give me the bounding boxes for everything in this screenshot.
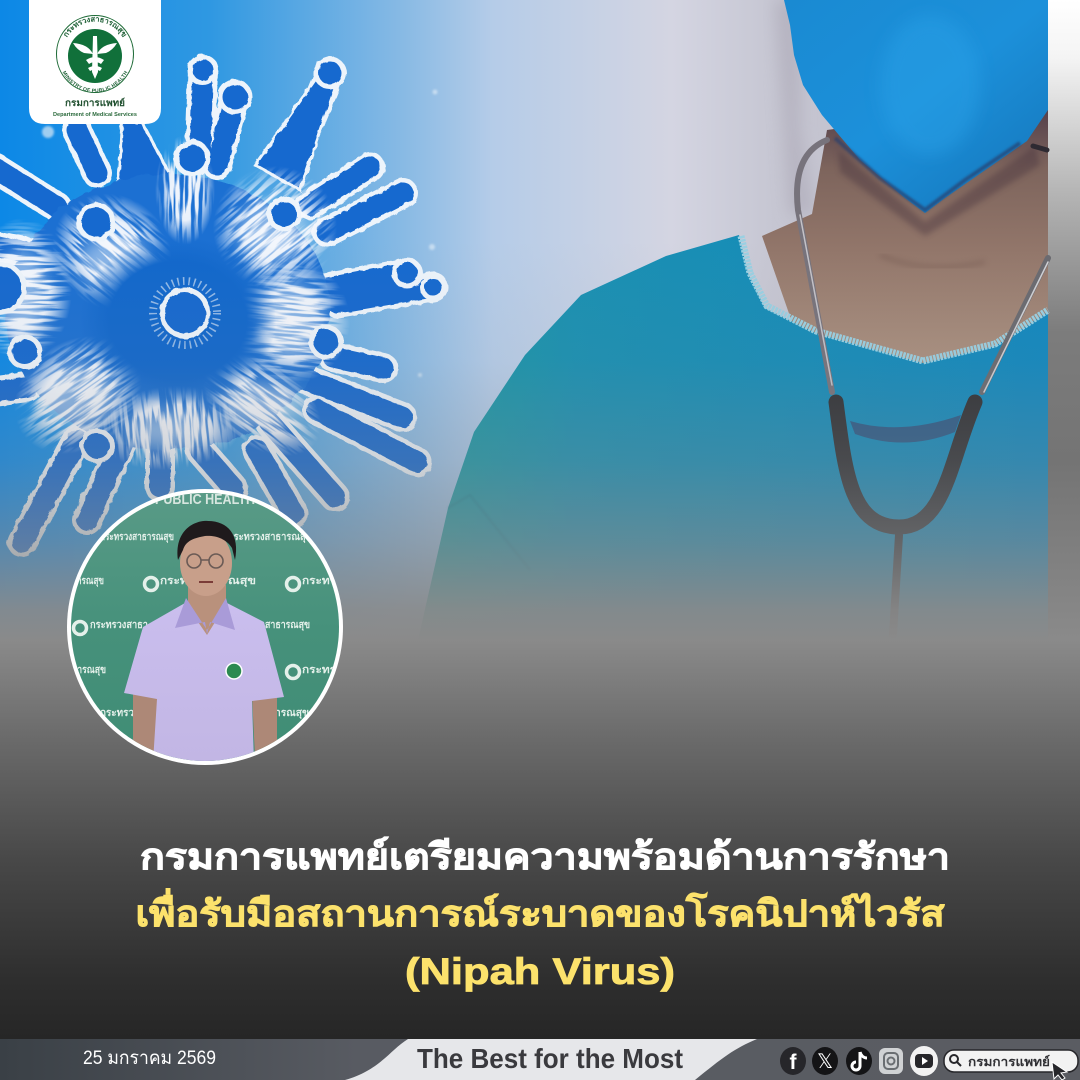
- arms: [133, 694, 277, 752]
- mask shadow: [835, 138, 1020, 210]
- shirt: [124, 603, 284, 762]
- backdrop text: ณสุข: [228, 576, 256, 587]
- logo seal: [56, 15, 134, 93]
- virus body: [0, 135, 362, 478]
- scrub sleeve fold: [448, 495, 530, 570]
- head: [180, 530, 232, 596]
- backdrop text: PUBLIC HEALTH: [155, 491, 255, 508]
- mouth: [199, 581, 213, 583]
- date: 25 มกราคม 2569: [83, 1048, 216, 1069]
- neck shadow: [838, 146, 1040, 236]
- soft white glow lobes: [0, 202, 322, 448]
- icon: x: 𝕏: [817, 1051, 833, 1073]
- slogan ribbon: [345, 1039, 757, 1080]
- virus spikes: [0, 70, 433, 542]
- doctor with mask and stethoscope: [418, 0, 1048, 640]
- wall shadow beside neck: [775, 0, 815, 215]
- backdrop text: กระทรวงสาธา: [90, 620, 148, 631]
- logo card: [29, 0, 161, 124]
- hair: [178, 521, 236, 560]
- portrait circle: [60, 485, 350, 775]
- floating particles: [42, 90, 438, 377]
- shirt pocket logo: [226, 663, 242, 679]
- virus wide spikes: [118, 70, 338, 190]
- hair texture lobes: [0, 135, 362, 478]
- icon: facebook: [780, 1047, 806, 1075]
- virus ring nodes: [0, 57, 444, 461]
- center ring hairs: [153, 281, 217, 345]
- logo english name: Department of Medical Services: [53, 112, 137, 118]
- neck skin: [188, 585, 226, 640]
- caduceus emblem: [73, 36, 117, 79]
- search pill: กรมการแพทย์: [968, 1054, 1050, 1069]
- scrub collar: [741, 236, 1048, 361]
- headline line 3: (Nipah Virus): [405, 951, 675, 992]
- scrub top: [418, 235, 1048, 640]
- headline line 2: เพื่อรับมือสถานการณ์ระบาดของโรคนิปาห์ไวรัส: [136, 888, 945, 934]
- backdrop text: กระทร: [302, 576, 337, 587]
- footer bar: [0, 1039, 1080, 1080]
- fade overlays: [0, 240, 1048, 642]
- backdrop text: ธารณสุข: [72, 665, 106, 676]
- backdrop text: ธารณสุข: [72, 576, 104, 587]
- stethoscope: [797, 140, 1048, 635]
- icon: tiktok: [846, 1047, 872, 1075]
- backdrop text: กระทรวงสาธารณสุข: [228, 532, 312, 543]
- backdrop text: กระทร: [302, 665, 337, 676]
- icon: facebook: f: [790, 1051, 798, 1074]
- slogan: The Best for the Most: [417, 1043, 683, 1074]
- headline: [136, 836, 950, 992]
- search pill: [944, 1050, 1078, 1072]
- backdrop text: ารณสุข: [275, 708, 309, 719]
- virus illustration: [0, 57, 444, 542]
- backdrop text: สาธารณสุข: [265, 620, 310, 631]
- face mask: [784, 0, 1048, 213]
- neck crease: [880, 255, 985, 267]
- right white strip: [1048, 0, 1080, 640]
- icon: instagram: [879, 1048, 903, 1074]
- logo thai name: กรมการแพทย์: [65, 97, 125, 109]
- mask highlight: [880, 15, 980, 155]
- backdrop text: กระทรวงสาธารณสุข: [100, 532, 174, 543]
- backdrop emblems: [74, 578, 300, 678]
- logo seal: MINISTRY OF PUBLIC HEALTH: [62, 70, 128, 92]
- backdrop text: กระทรว: [100, 708, 134, 719]
- backdrop text: [72, 491, 337, 719]
- collar: [175, 598, 235, 634]
- icon: cursor: [1052, 1062, 1067, 1080]
- logo seal: กระทรวงสาธารณสุข: [64, 16, 126, 38]
- virus blue core: [80, 236, 276, 404]
- headline line 1: กรมการแพทย์เตรียมความพร้อมด้านการรักษา: [140, 836, 950, 877]
- icon: youtube: [910, 1046, 938, 1076]
- icon: x: [812, 1047, 838, 1075]
- neck: [762, 100, 1048, 372]
- glasses: [187, 554, 223, 568]
- backdrop text: กระทร: [160, 576, 195, 587]
